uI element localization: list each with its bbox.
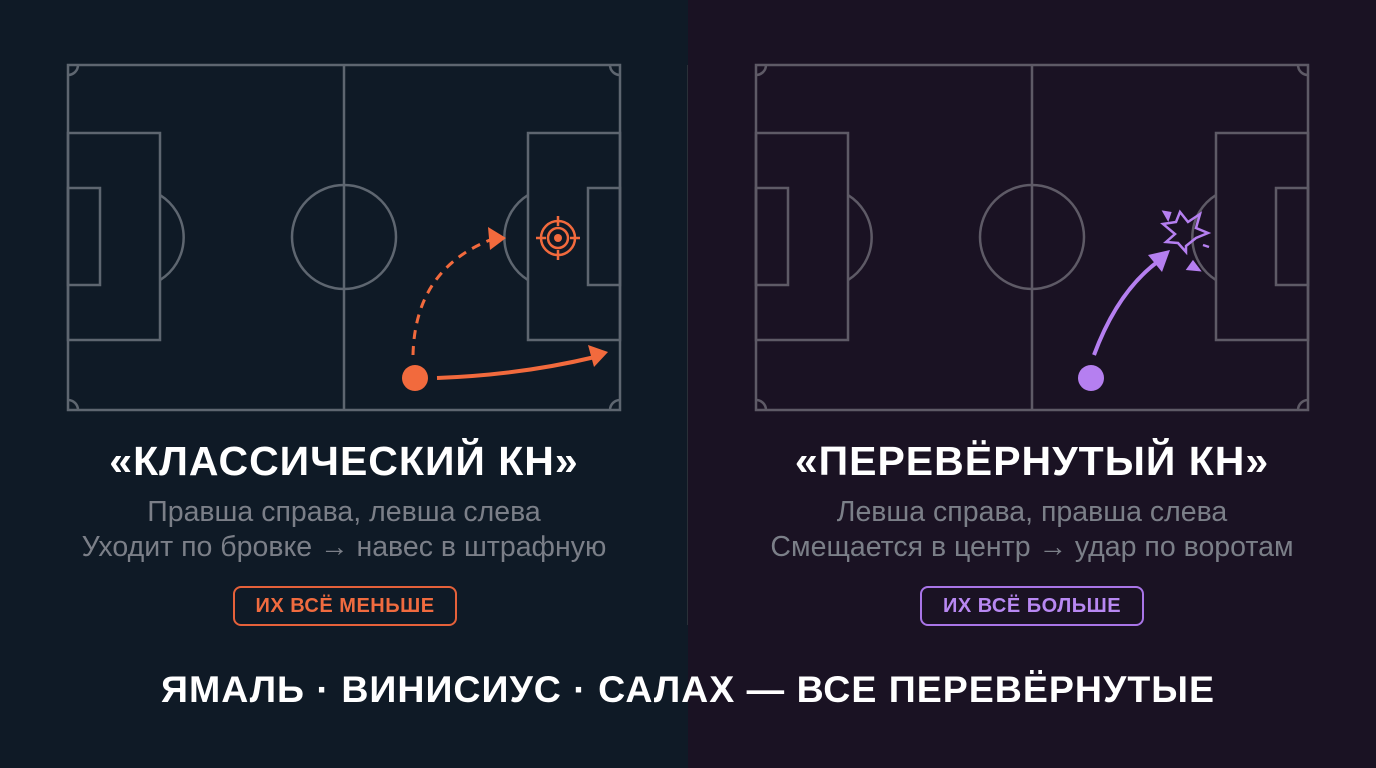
icon: player dot bbox=[1078, 365, 1104, 391]
badge: fewer: ИХ ВСЁ МЕНЬШЕ bbox=[255, 595, 435, 617]
badge: more: ИХ ВСЁ БОЛЬШЕ bbox=[943, 595, 1121, 617]
icon: player dot bbox=[402, 365, 428, 391]
text: classic description: Уходит по бровке → навес в штрафную bbox=[82, 531, 606, 563]
badge: more bbox=[920, 586, 1144, 626]
icon: burst bbox=[1163, 212, 1209, 270]
text: classic description bbox=[82, 496, 606, 563]
text: inverted description: Левша справа, правша слева bbox=[837, 496, 1227, 528]
text: inverted description: Смещается в центр → удар по воротам bbox=[770, 531, 1294, 563]
panel: inverted winger pitch bbox=[754, 64, 1310, 412]
footer headline: ЯМАЛЬ · ВИНИСИУС · САЛАХ — ВСЕ ПЕРЕВЁРНУТЫЕ bbox=[161, 668, 1215, 710]
panel: classic winger pitch bbox=[66, 64, 622, 412]
icon: target bbox=[536, 216, 580, 260]
text: classic description: Правша справа, левша слева bbox=[147, 496, 541, 528]
text: inverted description bbox=[770, 496, 1294, 563]
heading: inverted: «ПЕРЕВЁРНУТЫЙ КН» bbox=[795, 438, 1269, 484]
arrow: solid run along wing bbox=[437, 345, 608, 378]
heading: classic: «КЛАССИЧЕСКИЙ КН» bbox=[109, 438, 579, 484]
arrow: shot bbox=[1094, 250, 1170, 355]
badge: fewer bbox=[233, 586, 457, 626]
arrow: dashed cross path bbox=[413, 227, 506, 355]
